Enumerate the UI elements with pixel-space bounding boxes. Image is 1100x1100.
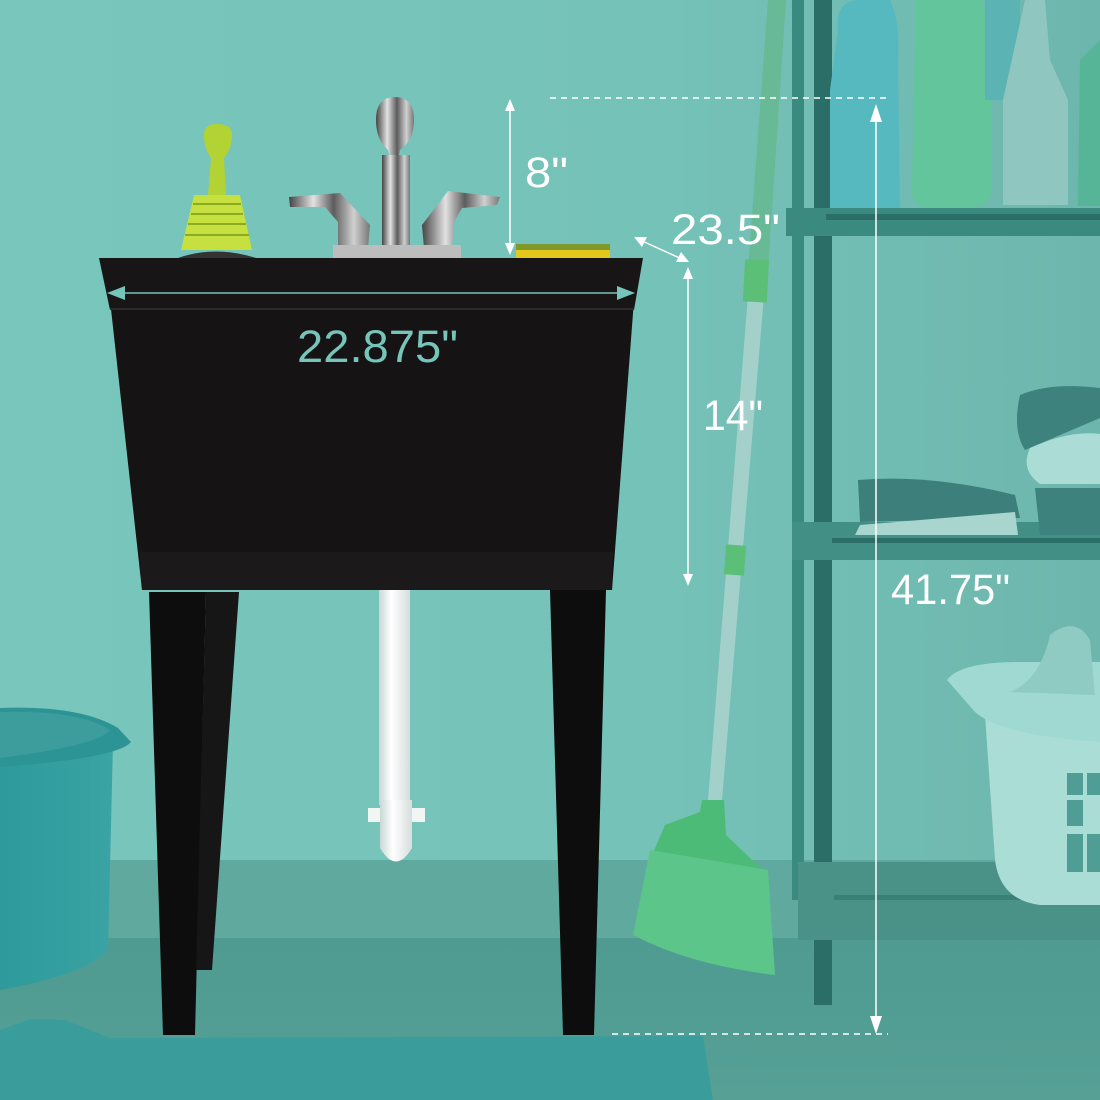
laundry basket [947, 626, 1100, 905]
floor mat [0, 1019, 713, 1100]
faucet [289, 97, 500, 258]
bottles on shelf [830, 0, 1100, 208]
dimension: 8 inch height: 8" [525, 149, 568, 197]
bucket [0, 708, 131, 990]
sink tub [99, 258, 643, 590]
dimension: 14 inch tub depth [683, 267, 763, 586]
dimension: 41.75 inch total height [550, 98, 1010, 1034]
plunger [178, 124, 256, 258]
metal shelving unit [786, 0, 1100, 1005]
dimension: 22.875 inch width [107, 286, 635, 372]
dimension: 23.5 inch depth: 23.5" [671, 206, 780, 254]
drain pipe [368, 590, 425, 862]
dimension: 23.5 inch depth [634, 206, 780, 262]
towels on shelves [855, 386, 1100, 535]
broom [633, 0, 786, 975]
dimension: 22.875 inch width: 22.875" [297, 321, 458, 372]
dimension: 41.75 inch total height: 41.75" [891, 566, 1010, 614]
dimension: 14 inch tub depth: 14" [703, 392, 763, 440]
sink legs [149, 590, 606, 1035]
dimension: 8 inch height [505, 99, 568, 255]
sponge [516, 244, 610, 258]
